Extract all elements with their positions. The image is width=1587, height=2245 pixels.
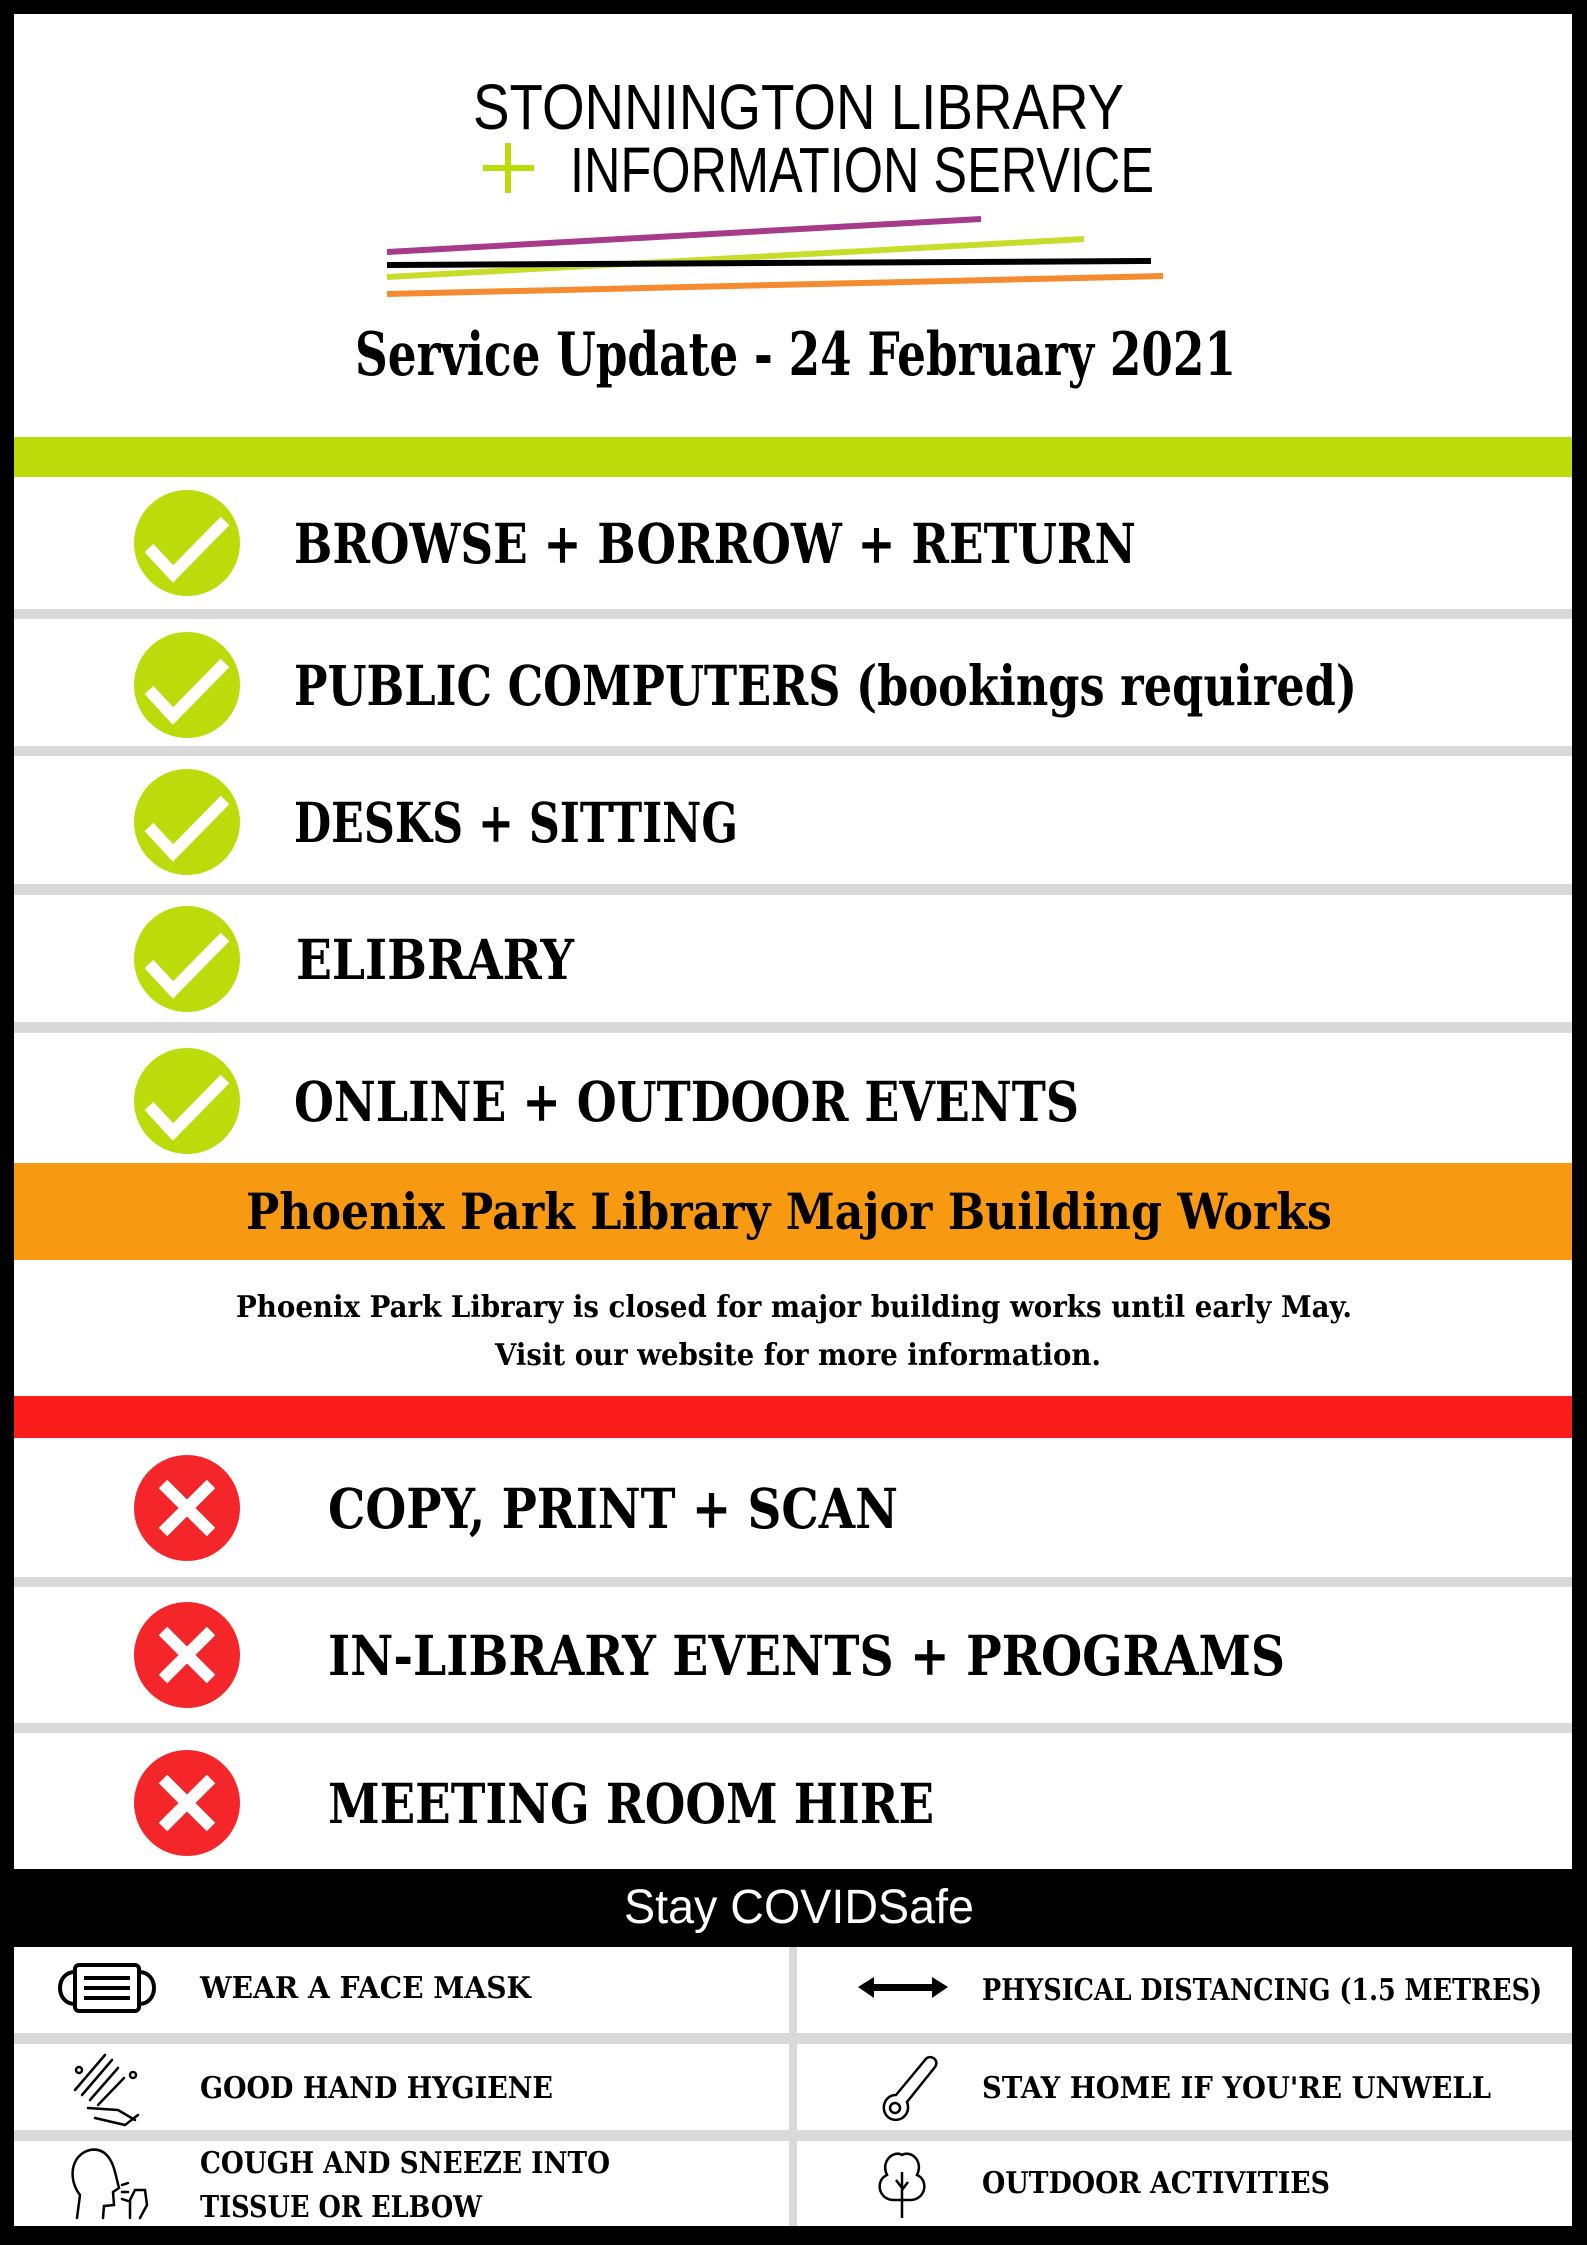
- available row 1: [134, 490, 1136, 596]
- covidsafe grid: TISSUE OR ELBOW: [200, 2190, 483, 2225]
- unavailable row 2: [134, 1602, 1285, 1708]
- text: cough and sneeze: COUGH AND SNEEZE INTO: [200, 2146, 610, 2181]
- title: Service Update - 24 February 2021: [355, 320, 1236, 390]
- orange banner: [14, 1163, 1572, 1260]
- text: outdoor activities: OUTDOOR ACTIVITIES: [982, 2166, 1330, 2201]
- text: good hand hygiene: GOOD HAND HYGIENE: [200, 2071, 553, 2106]
- icon: hand hygiene: [75, 2055, 138, 2125]
- unavailable row 1: [134, 1455, 898, 1561]
- covidsafe grid: [14, 1947, 1572, 2226]
- red bar: [14, 1396, 1572, 1438]
- Stay COVIDSafe heading: Stay COVIDSafe: [624, 1881, 974, 1934]
- available row 1: BROWSE + BORROW + RETURN: [294, 511, 1136, 576]
- available row 3: [134, 769, 738, 875]
- unavailable row 3: MEETING ROOM HIRE: [328, 1771, 934, 1836]
- available row 4: ELIBRARY: [296, 927, 575, 992]
- unavailable row 2: IN-LIBRARY EVENTS + PROGRAMS: [328, 1623, 1285, 1688]
- icon: tree: [880, 2154, 924, 2218]
- icon: face mask: [60, 1965, 154, 2011]
- available row 4: [134, 906, 575, 1012]
- icon: distancing arrow: [858, 1977, 948, 1998]
- icon: thermometer: [884, 2057, 936, 2120]
- logo: STONNINGTON LIBRARY: [473, 71, 1124, 143]
- green bar: [14, 437, 1572, 477]
- orange banner: Phoenix Park Library Major Building Works: [246, 1182, 1332, 1241]
- closure notice: Visit our website for more information.: [494, 1338, 1101, 1373]
- unavailable row 3: [134, 1750, 934, 1856]
- text: stay home: STAY HOME IF YOU'RE UNWELL: [982, 2071, 1491, 2106]
- icon: cough: [73, 2150, 147, 2218]
- available row 5: ONLINE + OUTDOOR EVENTS: [294, 1069, 1079, 1134]
- logo: [387, 71, 1163, 294]
- logo: INFORMATION SERVICE: [570, 134, 1154, 206]
- separators: [14, 609, 1572, 1733]
- unavailable row 1: COPY, PRINT + SCAN: [328, 1476, 898, 1541]
- available row 3: DESKS + SITTING: [294, 790, 738, 855]
- available row 2: PUBLIC COMPUTERS (bookings required): [294, 653, 1357, 718]
- text: wear a face mask: WEAR A FACE MASK: [199, 1971, 532, 2006]
- closure notice: [236, 1290, 1352, 1373]
- available row 2: [134, 632, 1357, 738]
- closure notice: Phoenix Park Library is closed for major building works until early May.: [236, 1290, 1352, 1325]
- available row 5: [134, 1048, 1079, 1154]
